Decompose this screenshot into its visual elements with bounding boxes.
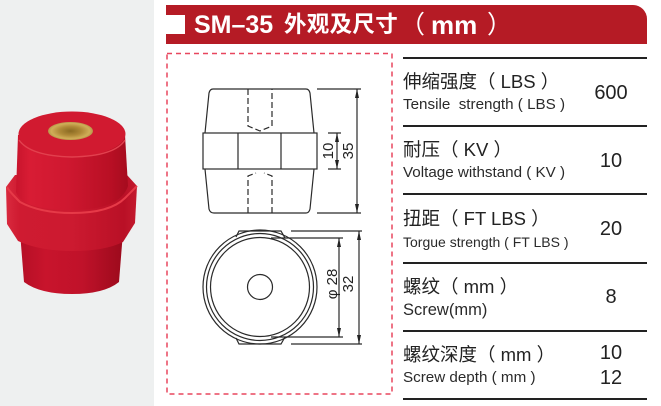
dimension label phi 28: φ 28 — [324, 269, 341, 299]
banner white square — [166, 15, 185, 34]
product photo panel — [0, 0, 154, 406]
dimension drawing panel — [166, 52, 393, 395]
row: screw: 8 — [605, 286, 617, 308]
dimension label 35: 35 — [340, 143, 357, 159]
row: screw depth: 螺纹深度（ mm ） — [403, 344, 555, 365]
row: tensile strength — [403, 71, 628, 113]
row: screw: Screw(mm) — [403, 301, 487, 319]
banner heading: ） — [487, 11, 512, 39]
row: torque strength: 20 — [600, 218, 622, 240]
top view drawing — [203, 230, 362, 344]
banner heading: （ — [400, 11, 425, 39]
row: tensile strength: 600 — [594, 82, 628, 104]
brass insert — [48, 122, 93, 140]
row: voltage withstand: 耐压（ KV ） — [403, 139, 512, 160]
row: voltage withstand: Voltage withstand ( KV ) — [403, 164, 565, 181]
row: torque strength — [403, 208, 622, 250]
row: screw depth: 12 — [600, 367, 622, 389]
row: screw depth: 10 — [600, 342, 622, 364]
row: screw depth: Screw depth ( mm ) — [403, 369, 536, 386]
row: screw depth — [403, 342, 622, 389]
dimension label 10: 10 — [320, 143, 337, 159]
dimension label 32: 32 — [340, 276, 357, 292]
row: torque strength: 扭距（ FT LBS ） — [403, 208, 550, 229]
row: voltage withstand — [403, 139, 622, 181]
row: screw: 螺纹（ mm ） — [403, 276, 518, 297]
row: tensile strength: 伸缩强度（ LBS ） — [403, 71, 559, 92]
row: screw — [403, 276, 617, 319]
row: torque strength: Torgue strength ( FT LBS ) — [403, 234, 568, 250]
product photo: red insulator — [6, 112, 138, 294]
side view arrows — [335, 89, 359, 213]
banner heading: SM–35 — [194, 11, 273, 39]
banner heading: mm — [431, 10, 477, 40]
top view arrows — [337, 231, 361, 344]
side view drawing — [203, 89, 361, 213]
title banner — [166, 5, 647, 44]
banner heading: 外观及尺寸 — [284, 12, 398, 37]
row: voltage withstand: 10 — [600, 150, 622, 172]
banner heading — [194, 10, 512, 40]
row: tensile strength: Tensile strength ( LBS ) — [403, 96, 565, 113]
spec table — [403, 57, 647, 400]
